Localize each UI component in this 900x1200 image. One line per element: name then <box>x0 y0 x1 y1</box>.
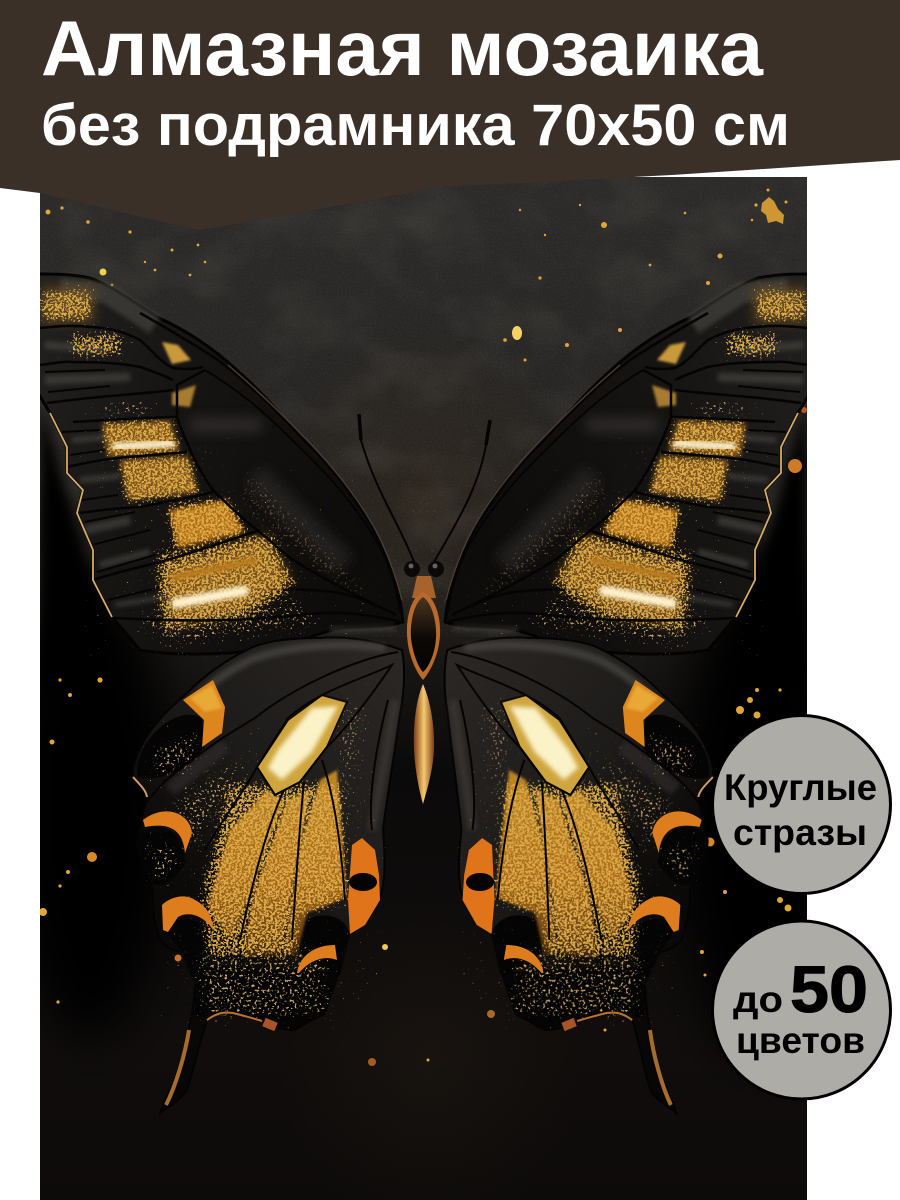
orange tail-side strip <box>348 838 380 934</box>
left forewing <box>38 274 403 654</box>
black dusted patches <box>137 715 350 1030</box>
artwork: butterfly picture <box>10 177 840 1200</box>
orange top patch <box>183 680 225 747</box>
right forewing (mirrored) <box>445 274 810 654</box>
right hindwing (mirrored) <box>433 638 717 1113</box>
left hindwing <box>133 638 404 1113</box>
gilded margin <box>50 413 112 617</box>
badge: up to 50 colours: цветов <box>736 1020 865 1061</box>
amber fan of rays <box>146 700 365 1018</box>
sheen on upper band <box>170 645 395 830</box>
wing sheen strips <box>45 288 395 630</box>
wing veins <box>40 326 400 622</box>
wing membrane <box>133 638 404 1113</box>
copper rim and tail <box>133 777 276 1105</box>
gold paint splatters <box>39 188 807 1066</box>
badge: round rhinestones <box>712 716 890 894</box>
badge: up to 50 colours: 50 <box>790 952 868 1026</box>
subtitle: без подрамника 70х50 см <box>41 93 790 158</box>
badge: round rhinestones: стразы <box>733 812 867 853</box>
badge: up to 50 colours: до <box>733 979 783 1020</box>
cream glitter cell <box>257 695 347 795</box>
badge: round rhinestones: Круглые <box>724 767 877 808</box>
thorax <box>407 592 440 680</box>
title: Алмазная мозаика <box>41 4 764 92</box>
orange crescents <box>143 811 337 973</box>
black eye spot <box>349 873 377 891</box>
abdomen <box>414 684 434 804</box>
header banner <box>0 0 900 230</box>
butterfly body <box>404 561 444 804</box>
glossy wing cell sheen <box>190 425 345 565</box>
outer gold dust bands <box>40 288 385 645</box>
eyes <box>404 561 444 577</box>
dark textured backdrop <box>10 177 840 1200</box>
wing membrane <box>38 274 403 654</box>
hindwing veins <box>145 652 398 940</box>
black margin ripples <box>45 370 170 600</box>
badge: up to 50 colours <box>712 921 890 1099</box>
leading edge ribs <box>140 313 402 612</box>
neck <box>412 576 436 598</box>
antennae <box>359 414 490 562</box>
